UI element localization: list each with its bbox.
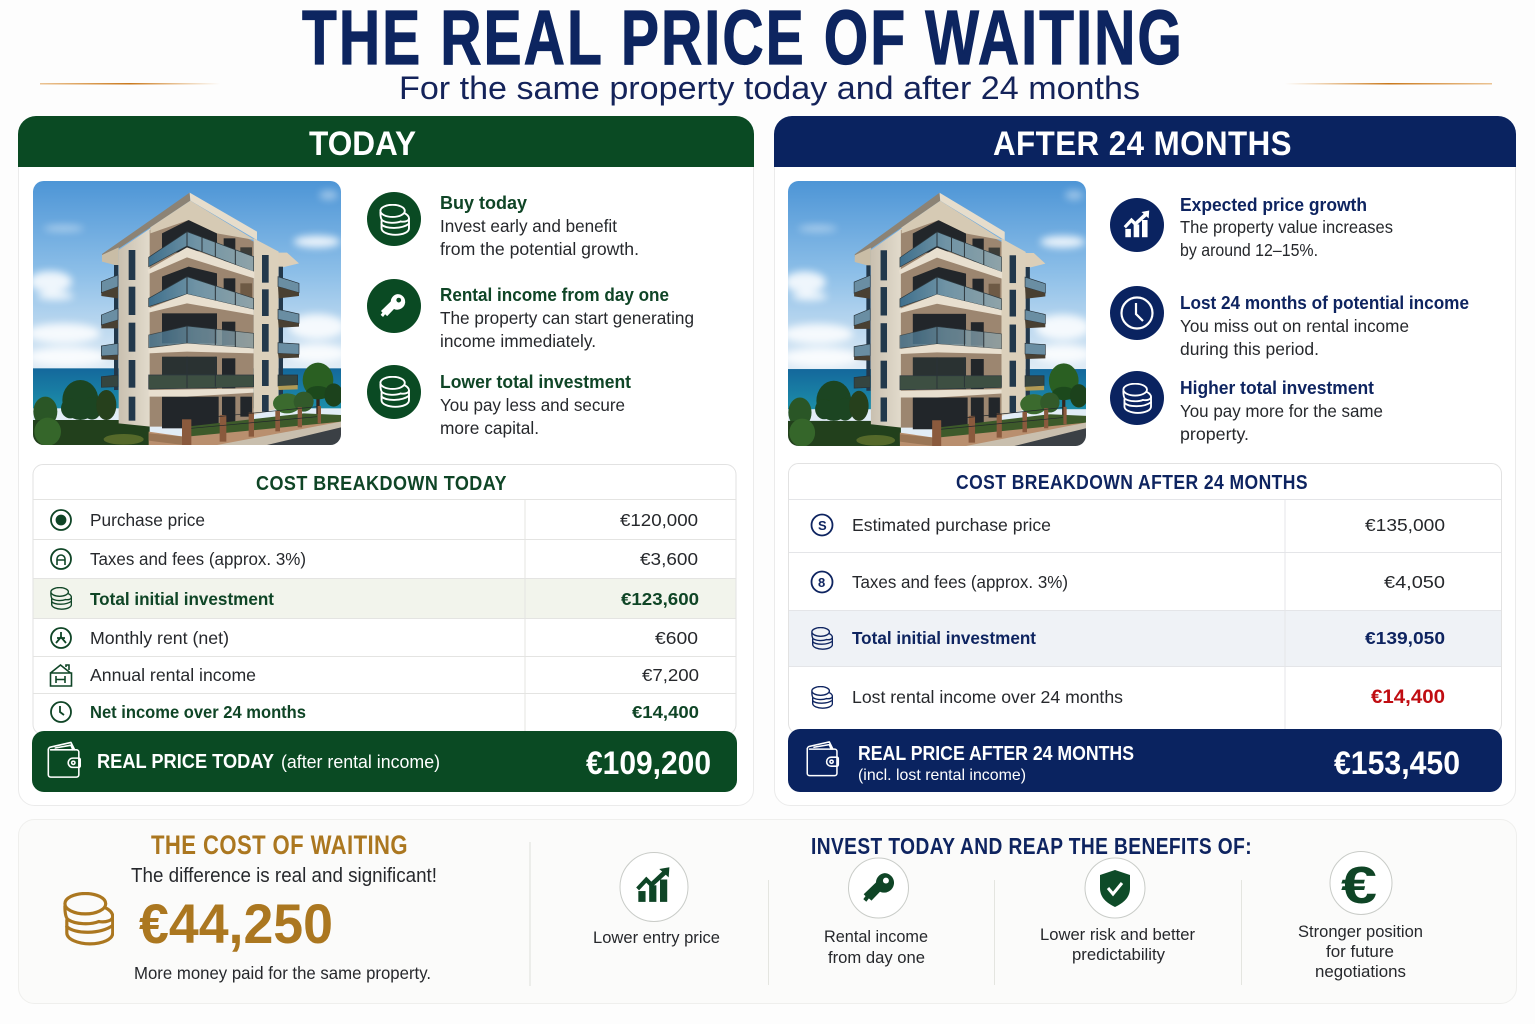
row: taxes after: 8 — [818, 575, 825, 590]
row: taxes after: €4,050 — [1384, 572, 1445, 592]
feature: price growth: The property value increases — [1180, 217, 1393, 237]
feature: rental income: Rental income from day one — [440, 285, 669, 305]
row: purchase price: Purchase price — [90, 510, 205, 530]
feature: lost income — [1110, 286, 1469, 359]
block: cost of waiting: More money paid for the same property. — [134, 963, 431, 983]
row: total initial investment: Total initial investment — [90, 589, 274, 609]
panel header today — [18, 116, 754, 167]
row: total initial investment — [51, 588, 699, 609]
feature: rental income: The property can start generating — [440, 308, 694, 328]
block: cost of waiting: The difference is real and significant! — [131, 865, 437, 887]
icon: wallet today — [48, 742, 80, 777]
row: taxes after — [812, 572, 1445, 592]
row: net income: €14,400 — [632, 702, 699, 722]
benefit: lower entry price — [593, 852, 720, 947]
row: total after: Total initial investment — [852, 628, 1036, 648]
row: lost rental income — [812, 687, 1445, 708]
accent rule left — [40, 83, 220, 84]
benefit: rental income: Rental income — [824, 928, 928, 946]
feature: lower investment: Lower total investment — [440, 372, 631, 392]
benefit: rental income — [824, 858, 928, 967]
row: estimated price: S — [818, 518, 827, 533]
benefit: stronger position — [1298, 852, 1423, 981]
panel header after — [774, 116, 1516, 167]
row: annual rental income: €7,200 — [642, 665, 699, 685]
benefit: lower risk: predictability — [1072, 946, 1166, 964]
benefit: lower risk: Lower risk and better — [1040, 926, 1196, 944]
feature: price growth: Expected price growth — [1180, 195, 1367, 215]
row: total after: €139,050 — [1365, 628, 1445, 648]
feature: higher investment: Higher total investment — [1180, 378, 1374, 398]
block: cost of waiting: THE COST OF WAITING — [151, 830, 408, 860]
total bar today: REAL PRICE TODAY — [97, 751, 275, 773]
total bar today: (after rental income) — [281, 752, 440, 772]
row: purchase price — [51, 510, 698, 530]
feature: higher investment: You pay more for the same — [1180, 401, 1383, 421]
row: total after — [812, 628, 1445, 649]
row: taxes after: Taxes and fees (approx. 3%) — [852, 572, 1068, 592]
row: net income — [51, 702, 699, 722]
heading: benefits: INVEST TODAY AND REAP THE BENEFITS OF: — [811, 833, 1252, 859]
panel: bottom summary — [18, 820, 1516, 1004]
feature: buy today: from the potential growth. — [440, 239, 639, 259]
row: estimated price: Estimated purchase price — [852, 515, 1051, 535]
icon: gold coins — [65, 894, 113, 944]
panel: today — [18, 116, 754, 806]
feature: lower investment: You pay less and secure — [440, 395, 625, 415]
feature: price growth: by around 12–15%. — [1180, 240, 1318, 260]
benefit: lower risk — [1040, 858, 1196, 964]
table: cost breakdown today — [33, 464, 736, 734]
row: annual rental income: Annual rental income — [90, 665, 256, 685]
row: taxes and fees — [51, 549, 698, 569]
feature: lost income: Lost 24 months of potential income — [1180, 293, 1469, 313]
icon: wallet after — [807, 742, 838, 776]
benefit: rental income: from day one — [828, 949, 925, 967]
row: monthly rent: €600 — [655, 628, 698, 648]
total bar today — [32, 731, 737, 792]
row: total initial investment: €123,600 — [621, 589, 699, 609]
feature: higher investment — [1110, 371, 1383, 444]
building photo today — [27, 181, 347, 450]
table: cost breakdown after: COST BREAKDOWN AFTER 24 MONTHS — [956, 472, 1308, 494]
total bar after — [788, 729, 1502, 792]
feature: lower investment: more capital. — [440, 418, 539, 438]
table: cost breakdown today: COST BREAKDOWN TODAY — [256, 473, 507, 495]
benefit: stronger position: for future — [1326, 943, 1394, 961]
feature: buy today: Buy today — [440, 193, 527, 213]
benefit: lower entry price: Lower entry price — [593, 929, 720, 947]
panel: after 24 months — [774, 116, 1516, 806]
row: estimated price — [812, 514, 1445, 536]
building photo after — [782, 181, 1092, 451]
row: net income: Net income over 24 months — [90, 702, 306, 722]
benefit: stronger position: negotiations — [1315, 963, 1406, 981]
row: purchase price: €120,000 — [620, 510, 698, 530]
feature: buy today: Invest early and benefit — [440, 216, 617, 236]
subtitle: For the same property today and after 24 months — [399, 70, 1140, 106]
total bar after: €153,450 — [1334, 745, 1460, 781]
benefit: stronger position: € — [1341, 857, 1377, 915]
panel body after — [774, 140, 1516, 806]
row: annual rental income — [50, 665, 699, 686]
row: taxes and fees: €3,600 — [640, 549, 698, 569]
block: cost of waiting — [65, 830, 437, 983]
feature: lower investment — [367, 365, 631, 438]
total bar today: €109,200 — [586, 745, 711, 781]
accent rule right — [1285, 83, 1492, 84]
feature: lost income: during this period. — [1180, 339, 1319, 359]
row: monthly rent — [51, 628, 698, 648]
feature: higher investment: property. — [1180, 424, 1249, 444]
feature: rental income: income immediately. — [440, 331, 596, 351]
total bar after: (incl. lost rental income) — [858, 767, 1026, 784]
heading today: TODAY — [309, 125, 416, 163]
total bar after: REAL PRICE AFTER 24 MONTHS — [858, 743, 1134, 765]
feature: price growth — [1110, 195, 1393, 260]
block: cost of waiting: €44,250 — [139, 892, 333, 955]
row: lost rental income: Lost rental income over 24 months — [852, 687, 1123, 707]
row: lost rental income: €14,400 — [1371, 687, 1445, 708]
row: estimated price: €135,000 — [1365, 515, 1445, 535]
feature: rental income — [367, 279, 694, 351]
heading after: AFTER 24 MONTHS — [993, 125, 1292, 163]
table: cost breakdown after — [788, 464, 1502, 734]
row: monthly rent: Monthly rent (net) — [90, 628, 229, 648]
feature: lost income: You miss out on rental income — [1180, 316, 1409, 336]
row: taxes and fees: Taxes and fees (approx. 3%) — [90, 549, 306, 569]
benefit: stronger position: Stronger position — [1298, 923, 1423, 941]
panel body today — [18, 140, 754, 806]
feature: buy today — [367, 192, 639, 259]
